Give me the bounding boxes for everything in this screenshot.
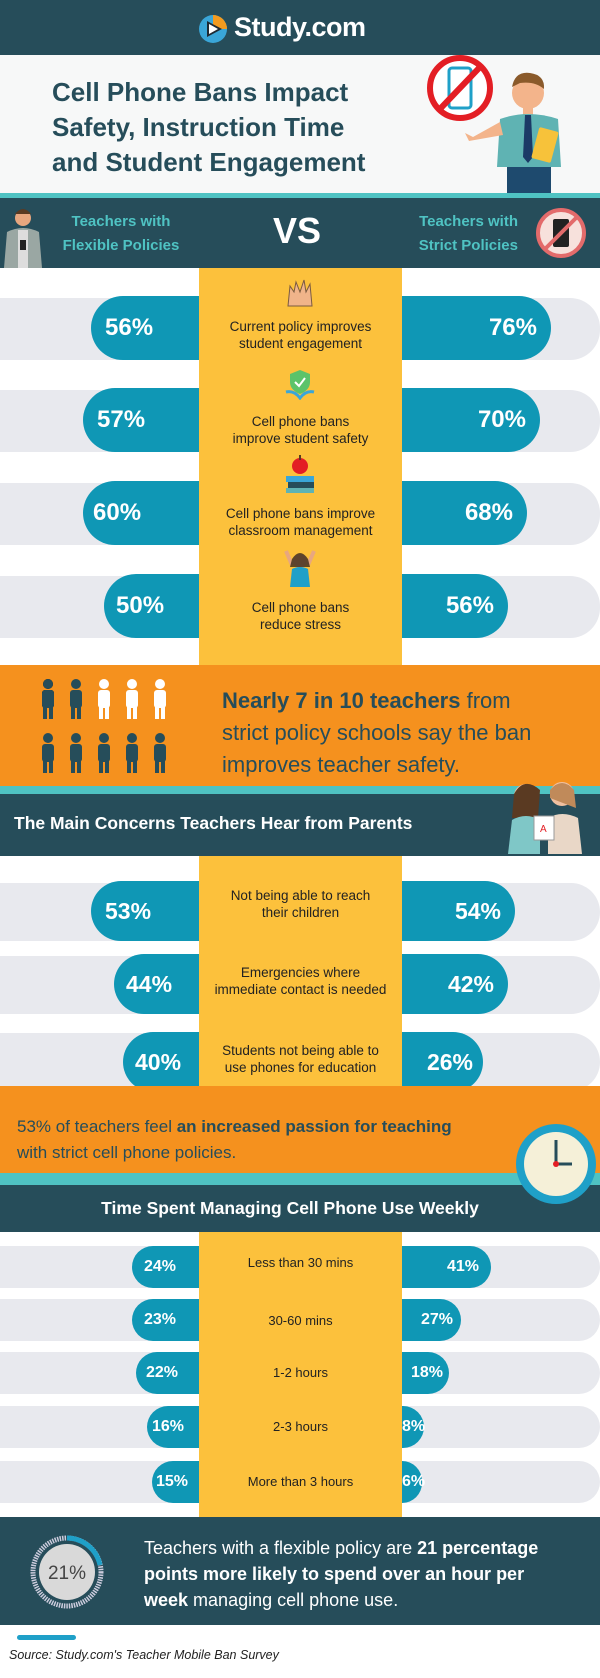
row: 1-2: 1-2 hours bbox=[273, 1365, 328, 1380]
row: reach children bbox=[91, 881, 515, 941]
callout text: Nearly 7 in 10 teachers from strict policy schools say the ban improves teacher safety. bbox=[222, 688, 531, 777]
row: education: Students not being able to bbox=[222, 1043, 379, 1058]
row: <30 mins: Less than 30 mins bbox=[248, 1255, 353, 1270]
row: 2-3 bbox=[147, 1406, 425, 1448]
label: flexible: Teachers with bbox=[72, 213, 170, 230]
row: classroom management: classroom management bbox=[228, 523, 373, 538]
label: flexible: Flexible Policies bbox=[63, 237, 179, 254]
row: education: 26% bbox=[427, 1049, 473, 1075]
icon: parents bbox=[508, 782, 582, 854]
row: emergencies bbox=[114, 954, 508, 1014]
row: stress: 50% bbox=[116, 592, 164, 619]
label: strict bbox=[419, 213, 518, 254]
row: safety: Cell phone bans bbox=[252, 414, 349, 429]
row: reach children: Not being able to reach bbox=[231, 888, 370, 903]
icon: strict phone ban bbox=[536, 208, 586, 258]
row: stress: 56% bbox=[446, 592, 494, 619]
section 2: parent concerns bbox=[0, 856, 600, 1086]
row: stress: reduce stress bbox=[260, 617, 341, 632]
row: classroom management: Cell phone bans improve bbox=[226, 506, 375, 521]
row: 30-60: 23% bbox=[144, 1311, 176, 1328]
icon: 21% gauge: 21% bbox=[48, 1563, 86, 1584]
icon: clock bbox=[516, 1124, 596, 1204]
row: classroom management bbox=[83, 455, 527, 545]
label: flexible bbox=[63, 213, 179, 254]
icon: 21% gauge bbox=[30, 1536, 104, 1608]
row: 30-60: 30-60 mins bbox=[268, 1313, 333, 1328]
row: 1-2 bbox=[136, 1352, 449, 1394]
heading: parent concerns bbox=[0, 794, 600, 856]
row: <30 mins: 24% bbox=[144, 1258, 176, 1275]
section 3: time spent bbox=[0, 1232, 600, 1517]
accent line bbox=[17, 1635, 76, 1640]
title section bbox=[0, 55, 600, 193]
row: emergencies: 44% bbox=[126, 971, 172, 997]
row: education: 40% bbox=[135, 1049, 181, 1075]
icon: teacher bbox=[465, 72, 561, 193]
row: classroom management: 60% bbox=[93, 499, 141, 526]
row: engagement bbox=[91, 280, 551, 360]
icon: parents: A bbox=[540, 824, 547, 835]
logo: Study.com bbox=[234, 12, 366, 42]
divider bbox=[0, 193, 600, 198]
label: strict: Teachers with bbox=[419, 213, 518, 230]
row: 30-60 bbox=[132, 1299, 461, 1341]
row: classroom management: 68% bbox=[465, 499, 513, 526]
row: safety: 57% bbox=[97, 406, 145, 433]
vs bar bbox=[0, 198, 600, 268]
row: >3 hours: More than 3 hours bbox=[248, 1474, 353, 1489]
row: emergencies: immediate contact is needed bbox=[215, 982, 386, 997]
heading: time spent bbox=[0, 1185, 600, 1232]
callout: passion bbox=[0, 1086, 600, 1173]
row: safety bbox=[83, 370, 540, 452]
source: Source: Study.com's Teacher Mobile Ban Survey bbox=[9, 1648, 279, 1662]
section 1: policy outcomes bbox=[0, 268, 600, 665]
row: >3 hours bbox=[152, 1461, 425, 1503]
row: reach children: 54% bbox=[455, 898, 501, 924]
callout: teacher safety bbox=[0, 665, 600, 786]
yellow column bbox=[199, 268, 402, 665]
row: engagement: 76% bbox=[489, 314, 537, 341]
row: reach children: 53% bbox=[105, 898, 151, 924]
row: 30-60: 27% bbox=[421, 1311, 453, 1328]
VS: VS bbox=[273, 210, 321, 251]
summary panel bbox=[0, 1517, 600, 1625]
row: 1-2: 22% bbox=[146, 1364, 178, 1381]
row: <30 mins: 41% bbox=[447, 1258, 479, 1275]
heading: time spent: Time Spent Managing Cell Phone Use Weekly bbox=[101, 1198, 479, 1218]
row: >3 hours: 6% bbox=[402, 1473, 425, 1490]
icon: phone ban bbox=[427, 55, 493, 121]
title: Cell Phone Bans Impact Safety, Instruction Time and Student Engagement bbox=[52, 77, 365, 177]
row: 2-3: 16% bbox=[152, 1418, 184, 1435]
row: 2-3: 8% bbox=[402, 1418, 425, 1435]
row: stress: Cell phone bans bbox=[252, 600, 349, 615]
summary text: Teachers with a flexible policy are 21 percentage points more likely to spend over an hour per week managing cell phone use. bbox=[144, 1538, 538, 1610]
row: 2-3: 2-3 hours bbox=[273, 1419, 328, 1434]
row: 1-2: 18% bbox=[411, 1364, 443, 1381]
row: education: use phones for education bbox=[225, 1060, 376, 1075]
row: engagement: student engagement bbox=[239, 336, 362, 351]
label: strict: Strict Policies bbox=[419, 237, 518, 254]
row: >3 hours: 15% bbox=[156, 1473, 188, 1490]
row: engagement: Current policy improves bbox=[230, 319, 371, 334]
row: emergencies: 42% bbox=[448, 971, 494, 997]
callout: passion: 53% of teachers feel an increased passion for teaching with strict cell phone policies. bbox=[17, 1117, 452, 1162]
icon: student with phone bbox=[4, 209, 42, 268]
row: <30 mins bbox=[132, 1246, 491, 1288]
header bar bbox=[0, 0, 600, 55]
row: reach children: their children bbox=[262, 905, 339, 920]
row: engagement: 56% bbox=[105, 314, 153, 341]
row: education bbox=[123, 1032, 483, 1086]
heading: parent concerns: The Main Concerns Teachers Hear from Parents bbox=[14, 813, 412, 833]
icon: people 7 in 10 bbox=[42, 679, 166, 773]
row: emergencies: Emergencies where bbox=[241, 965, 360, 980]
row: safety: 70% bbox=[478, 406, 526, 433]
row: safety: improve student safety bbox=[233, 431, 368, 446]
row: stress bbox=[104, 550, 508, 638]
